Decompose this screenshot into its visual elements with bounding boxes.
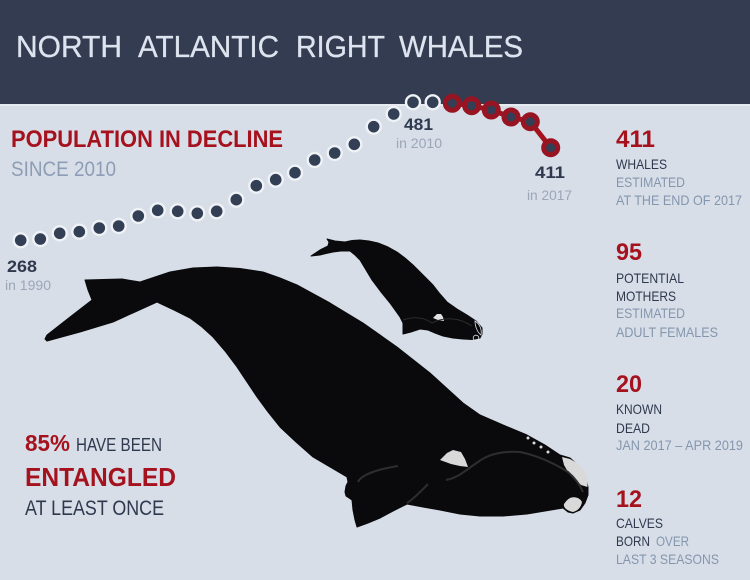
stat: 20 known dead: KNOWN xyxy=(616,401,662,417)
line chart: population dots xyxy=(14,95,558,247)
eye patch xyxy=(440,450,468,467)
title: RIGHT xyxy=(296,29,385,64)
stat: 12 calves: 12 xyxy=(616,486,642,513)
calf snout outlines xyxy=(473,321,481,341)
callout: 85% entangled: AT LEAST ONCE xyxy=(25,497,164,520)
data label: 268 in 1990: in 1990 xyxy=(5,277,51,293)
stat: 12 calves: BORN xyxy=(616,533,650,549)
data label: 411 in 2017: in 2017 xyxy=(527,187,572,203)
data label: 268 in 1990: 268 xyxy=(7,257,37,276)
stat: 411 whales: WHALES xyxy=(616,156,667,172)
data label: 411 in 2017: 411 xyxy=(535,163,565,182)
mouth and flipper lines xyxy=(358,452,583,503)
callout: 85% entangled: ENTANGLED xyxy=(25,462,176,492)
stat: 20 known dead: 20 xyxy=(616,371,642,398)
stat: 12 calves: LAST 3 SEASONS xyxy=(616,551,719,567)
stat: 12 calves: CALVES xyxy=(616,515,663,531)
heading: population in decline: SINCE 2010 xyxy=(11,158,116,181)
stat: 95 potential mothers: ESTIMATED xyxy=(616,305,685,321)
heading: population in decline xyxy=(11,126,283,181)
callout: 85% entangled: 85% xyxy=(25,430,70,456)
title: ATLANTIC xyxy=(138,29,279,64)
stat: 95 potential mothers: 95 xyxy=(616,239,642,266)
data label: 411 in 2017 xyxy=(527,163,572,203)
calf eye patch xyxy=(433,314,444,321)
stat: 95 potential mothers: MOTHERS xyxy=(616,288,676,304)
stat: 95 potential mothers: ADULT FEMALES xyxy=(616,324,718,340)
stat: 20 known dead: DEAD xyxy=(616,420,650,436)
illustration: adult whale xyxy=(45,267,588,527)
stat: 12 calves: OVER xyxy=(656,533,689,549)
stat: 12 calves xyxy=(616,486,719,567)
data label: 481 in 2010: in 2010 xyxy=(396,135,442,151)
heading: population in decline: POPULATION IN DECLINE xyxy=(11,126,283,153)
stat: 20 known dead xyxy=(616,371,743,453)
declining dots 2010 to 2017 xyxy=(445,96,558,155)
callout: 85% entangled xyxy=(25,430,176,520)
stat: 411 whales: 411 xyxy=(616,126,655,153)
stat: 95 potential mothers: POTENTIAL xyxy=(616,270,684,286)
header band xyxy=(0,0,750,106)
stat: 411 whales xyxy=(616,126,742,208)
rising dots 1990 to 2010 xyxy=(14,95,440,247)
stat: 411 whales: ESTIMATED xyxy=(616,174,685,190)
illustration: calf whale xyxy=(311,239,482,341)
title xyxy=(16,29,523,64)
head callosity dots xyxy=(526,436,550,454)
calf mouth line xyxy=(403,318,472,326)
snout callosities xyxy=(562,457,588,487)
title: WHALES xyxy=(399,29,523,64)
data label: 481 in 2010 xyxy=(396,115,442,151)
title: NORTH xyxy=(16,29,122,64)
callout: 85% entangled: HAVE BEEN xyxy=(76,435,162,455)
stat: 95 potential mothers xyxy=(616,239,718,340)
data label: 481 in 2010: 481 xyxy=(404,115,433,134)
data label: 268 in 1990 xyxy=(5,257,51,293)
